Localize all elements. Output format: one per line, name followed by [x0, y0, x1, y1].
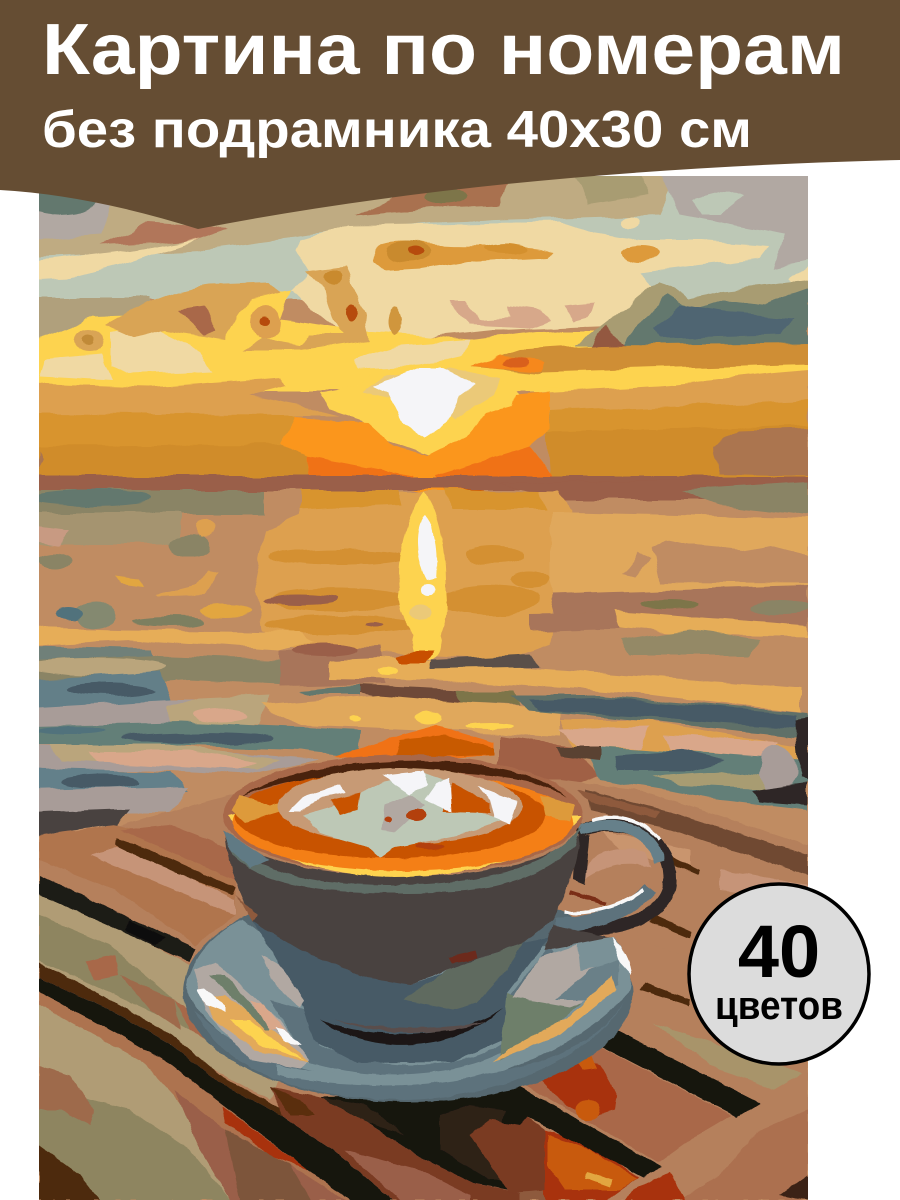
sun and glow: [280, 368, 555, 495]
painting: sunset and coffee cup: [23, 170, 820, 1200]
smile under cup: [320, 1008, 503, 1045]
dark cloud on right: [575, 280, 808, 346]
painting base: [39, 298, 808, 1200]
badge label: цветов: [715, 984, 843, 1028]
sky: [25, 170, 820, 490]
badge: 40 colours: [689, 884, 869, 1064]
left plank 3: [39, 985, 350, 1200]
cup body: [225, 835, 580, 985]
cross plank: [607, 1070, 808, 1200]
banner shape: [0, 0, 900, 229]
right planks: [644, 823, 808, 886]
handle: [556, 825, 670, 929]
plank gaps: [39, 790, 808, 1200]
coffee cup and saucer: [183, 755, 670, 1102]
wooden table: [39, 780, 808, 1200]
bright diagonal bands: [330, 658, 800, 712]
right side water details: [560, 718, 798, 760]
small brown sky blobs: [105, 283, 280, 340]
saucer right reflection: [513, 945, 620, 1007]
title line 2: без подрамника 40х30 см: [42, 101, 752, 159]
sea: [23, 476, 820, 838]
badge number: 40: [738, 910, 820, 993]
sun reflection: [334, 492, 514, 762]
left plank 2: [39, 885, 280, 1100]
saucer: [182, 910, 634, 1102]
rim and coffee: [223, 755, 583, 875]
saucer left reflection: [193, 962, 310, 1068]
header banner: [0, 0, 900, 229]
cup foot shading: [270, 945, 560, 1074]
lower plank: [440, 1166, 546, 1200]
badge circle: [689, 884, 869, 1064]
central orange water: [255, 492, 570, 660]
horizon orange bands: [30, 378, 340, 415]
title line 1: Картина по номерам: [42, 10, 845, 90]
latte art heart: [303, 773, 503, 858]
sky orange blobs: [373, 241, 555, 272]
